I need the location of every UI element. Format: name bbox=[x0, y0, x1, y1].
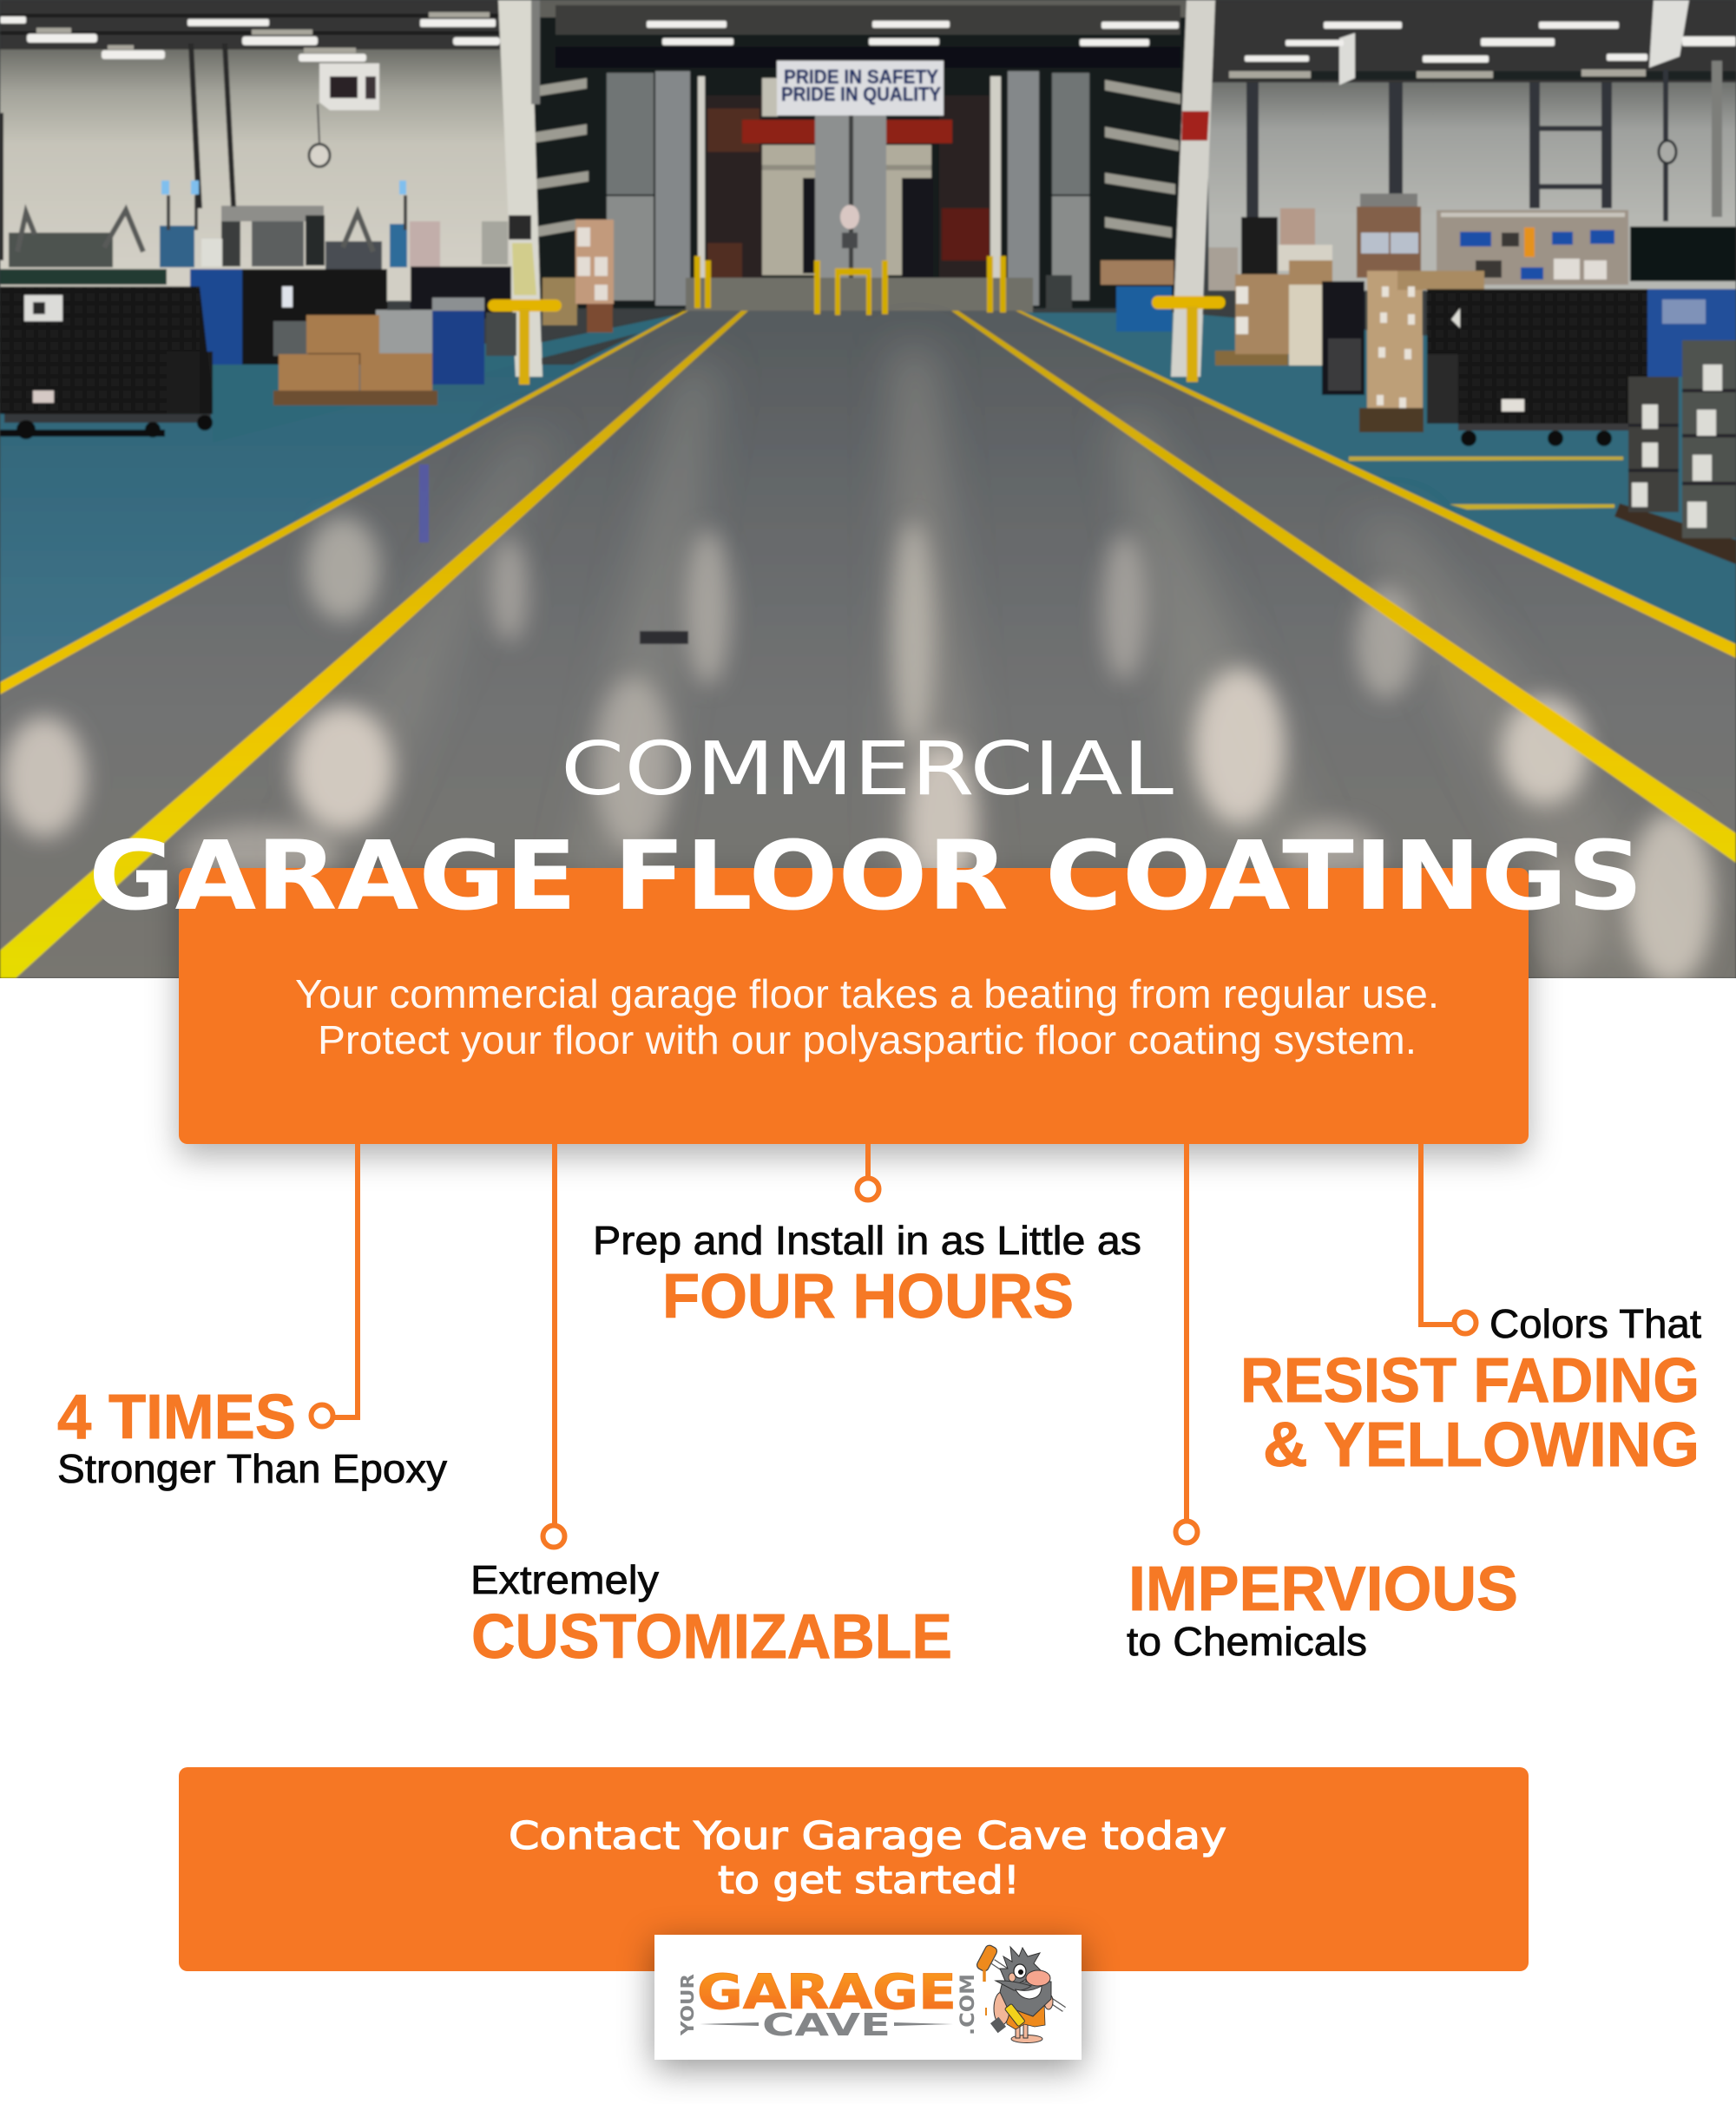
feature: customizable: Extremely bbox=[470, 1557, 659, 1602]
back floor band bbox=[686, 278, 1033, 312]
icon: caveman mascot bbox=[976, 1943, 1064, 2043]
gray coated floor bbox=[0, 311, 1736, 978]
hero photo: warehouse floor bbox=[0, 0, 1736, 985]
left blue floor bbox=[0, 311, 686, 688]
feature: 4 times stronger: Stronger Than Epoxy bbox=[57, 1446, 447, 1491]
feature: impervious bbox=[1127, 1555, 1518, 1664]
title: COMMERCIAL bbox=[561, 727, 1174, 812]
banner: PRIDE IN QUALITY bbox=[781, 83, 941, 105]
intro text: Protect your floor with our polyaspartic floor coating system. bbox=[318, 1017, 1417, 1062]
gray wall panels bbox=[607, 73, 1089, 194]
feature: customizable: CUSTOMIZABLE bbox=[471, 1602, 952, 1672]
gray bins stack bbox=[1614, 503, 1736, 564]
title bbox=[89, 727, 1643, 931]
call to action text: to get started! bbox=[718, 1858, 1020, 1903]
feature: four hours: Prep and Install in as Little as bbox=[593, 1218, 1141, 1263]
right black crate bbox=[1427, 289, 1647, 424]
hanging sign bbox=[319, 63, 379, 110]
logo wordmark: GARAGE bbox=[697, 1964, 957, 2020]
right shelving bbox=[1437, 210, 1628, 285]
banner bbox=[777, 61, 944, 115]
back racks with stored goods bbox=[707, 95, 990, 295]
intro text bbox=[295, 971, 1439, 1062]
left racks bbox=[531, 78, 589, 238]
feature: four hours: FOUR HOURS bbox=[662, 1262, 1074, 1331]
right wall bbox=[1208, 82, 1736, 291]
feature: impervious: IMPERVIOUS bbox=[1128, 1555, 1518, 1624]
ceiling lights bbox=[0, 16, 1736, 62]
right pillar bbox=[1171, 0, 1215, 377]
left box stack bbox=[575, 220, 614, 304]
banner: PRIDE IN SAFETY bbox=[784, 66, 938, 88]
hanging signs right bbox=[1339, 33, 1355, 85]
center yellow bollards bbox=[694, 256, 1006, 315]
call to action text bbox=[509, 1814, 1226, 1903]
center signs bbox=[840, 205, 859, 229]
left equipment row bbox=[0, 269, 167, 285]
feature: resist fading: & YELLOWING bbox=[1263, 1410, 1700, 1480]
center back structure bbox=[531, 17, 1200, 308]
SMC boxes and trash bbox=[273, 321, 308, 356]
connector: resist fading bbox=[1421, 1144, 1476, 1333]
blue reflection bbox=[419, 464, 429, 542]
drain bbox=[640, 631, 688, 644]
feature: 4 times stronger: 4 TIMES bbox=[57, 1383, 296, 1452]
left back crates bbox=[486, 312, 516, 356]
right side goods bbox=[1046, 275, 1072, 310]
logo wordmark: .COM bbox=[957, 1974, 979, 2035]
feature: resist fading: RESIST FADING bbox=[1240, 1346, 1700, 1416]
panel: intro bbox=[179, 868, 1529, 1144]
door area bbox=[762, 145, 931, 275]
connector: four hours bbox=[858, 1144, 878, 1200]
right racks bbox=[1105, 80, 1180, 238]
connector: customizable bbox=[543, 1144, 564, 1547]
connector: 4 times stronger bbox=[311, 1144, 358, 1427]
ceiling bbox=[0, 0, 1736, 87]
logo card bbox=[654, 1935, 1082, 2060]
yellow floor lines bbox=[0, 311, 688, 694]
feature: impervious: to Chemicals bbox=[1127, 1619, 1367, 1664]
left black crate bbox=[0, 286, 200, 414]
left pillar bbox=[498, 0, 542, 377]
left yellow post bbox=[488, 299, 562, 312]
center column bbox=[813, 115, 888, 279]
logo wordmark bbox=[677, 1964, 979, 2043]
floor reflections bbox=[286, 347, 1719, 972]
feature: resist fading bbox=[1240, 1301, 1701, 1480]
wall clock bbox=[309, 144, 330, 167]
title: GARAGE FLOOR COATINGS bbox=[89, 820, 1643, 931]
call to action text: Contact Your Garage Cave today bbox=[509, 1814, 1226, 1858]
feature: customizable bbox=[470, 1557, 952, 1672]
connector: impervious bbox=[1175, 1144, 1198, 1543]
machines bbox=[9, 233, 113, 267]
right yellow post bbox=[1152, 296, 1226, 309]
logo wordmark: CAVE bbox=[762, 2008, 891, 2043]
feature: 4 times stronger bbox=[57, 1383, 447, 1491]
feature: four hours bbox=[593, 1218, 1141, 1331]
dim ceiling lights bbox=[36, 12, 1646, 78]
panel: call to action bbox=[179, 1767, 1529, 1971]
right blue floor bbox=[1018, 312, 1736, 651]
feature: resist fading: Colors That bbox=[1489, 1301, 1701, 1346]
beige over door bbox=[762, 78, 778, 116]
right columns and ladder bbox=[1246, 69, 1668, 221]
left wall bbox=[0, 49, 512, 301]
cream box stack bbox=[1367, 271, 1423, 417]
logo wordmark: YOUR bbox=[677, 1974, 698, 2036]
intro text: Your commercial garage floor takes a beating from regular use. bbox=[295, 971, 1439, 1016]
red bar bbox=[742, 120, 815, 143]
